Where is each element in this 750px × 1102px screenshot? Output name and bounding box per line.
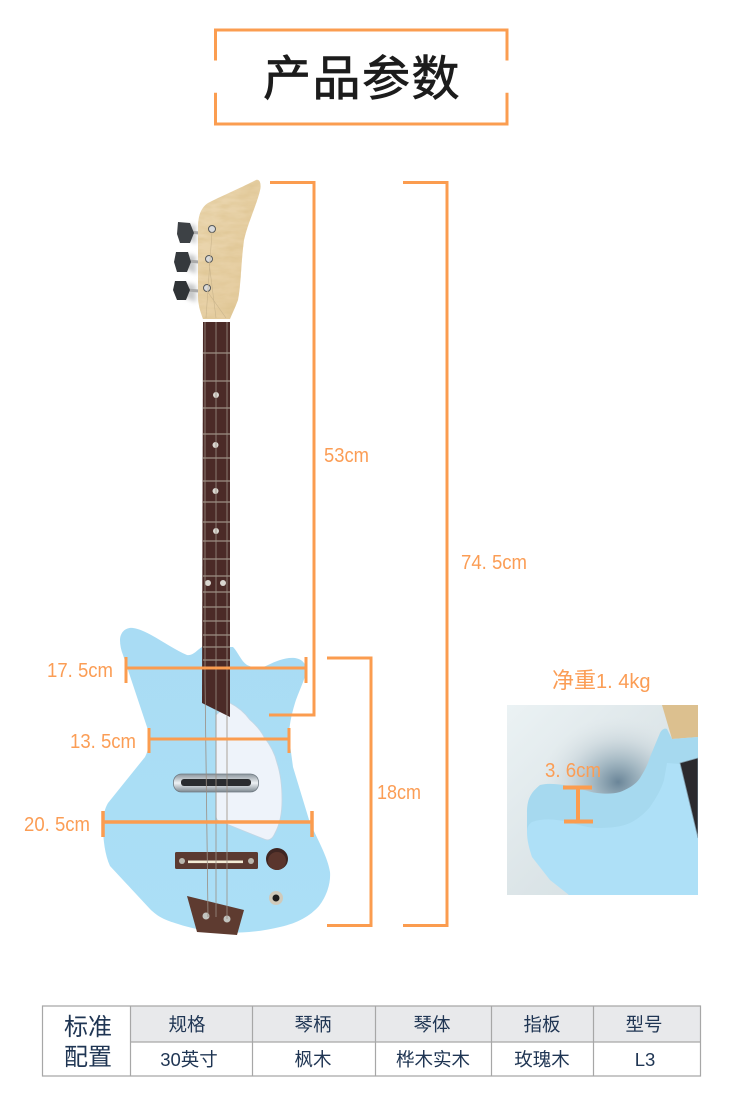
pickguard — [216, 703, 282, 840]
value cells: 玫瑰木 — [514, 1049, 570, 1070]
header cells — [168, 1014, 663, 1035]
fret markers — [205, 392, 226, 586]
frets — [203, 353, 230, 660]
value cells: 桦木实木 — [396, 1049, 470, 1070]
icon: tuning pegs — [173, 222, 199, 302]
row title: 标准 — [64, 1014, 112, 1041]
header cells: 琴体 — [413, 1014, 451, 1035]
title text: 产品参数 — [263, 39, 461, 109]
label: 17.5cm: 17. 5cm — [47, 660, 113, 682]
header cells: 规格 — [168, 1014, 206, 1035]
pickup — [174, 774, 258, 792]
guitar — [103, 180, 330, 935]
title — [216, 30, 507, 124]
thickness photo — [507, 705, 698, 895]
label: 3.6cm: 3. 6cm — [545, 760, 601, 782]
fretboard — [202, 322, 230, 717]
value cells — [160, 1049, 655, 1070]
header cells: 指板 — [523, 1014, 561, 1035]
value cells: 枫木 — [294, 1049, 332, 1070]
label: 18cm: 18cm — [377, 782, 421, 804]
wood grain — [198, 180, 261, 319]
value cells: 30英寸 — [160, 1049, 218, 1070]
bar: upper width — [126, 657, 306, 683]
fretboard end — [680, 758, 698, 838]
knob — [266, 848, 288, 870]
label: 53cm: 53cm — [324, 445, 369, 467]
bridge — [175, 852, 258, 869]
value cells: L3 — [635, 1049, 655, 1070]
label: 20.5cm: 20. 5cm — [24, 814, 90, 836]
dimension brackets — [103, 182, 447, 926]
thickness marker — [563, 788, 593, 822]
label: 13.5cm: 13. 5cm — [70, 731, 136, 753]
spec table — [42, 1006, 700, 1076]
title frame — [216, 30, 507, 124]
body front — [527, 832, 569, 895]
header cells: 型号 — [625, 1014, 663, 1035]
row title: 配置 — [64, 1044, 112, 1071]
bar: waist width — [149, 728, 289, 753]
headstock — [198, 180, 261, 319]
bar: lower width — [103, 811, 312, 837]
guitar body — [103, 628, 330, 933]
bracket: neck length — [269, 182, 314, 715]
strings — [205, 322, 227, 919]
row title — [64, 1014, 112, 1071]
label: 74.5cm: 74. 5cm — [461, 552, 527, 574]
bracket: total length — [403, 182, 447, 926]
tailpiece — [187, 896, 244, 935]
header cells: 琴柄 — [294, 1014, 332, 1035]
jack — [269, 891, 283, 905]
tuner posts — [204, 226, 216, 292]
label: net weight: 净重1. 4kg — [552, 663, 650, 695]
table header row fill — [131, 1006, 700, 1042]
neck wood — [662, 705, 698, 739]
body side — [527, 728, 698, 830]
bracket: body length — [327, 658, 371, 926]
table grid — [42, 1006, 700, 1076]
